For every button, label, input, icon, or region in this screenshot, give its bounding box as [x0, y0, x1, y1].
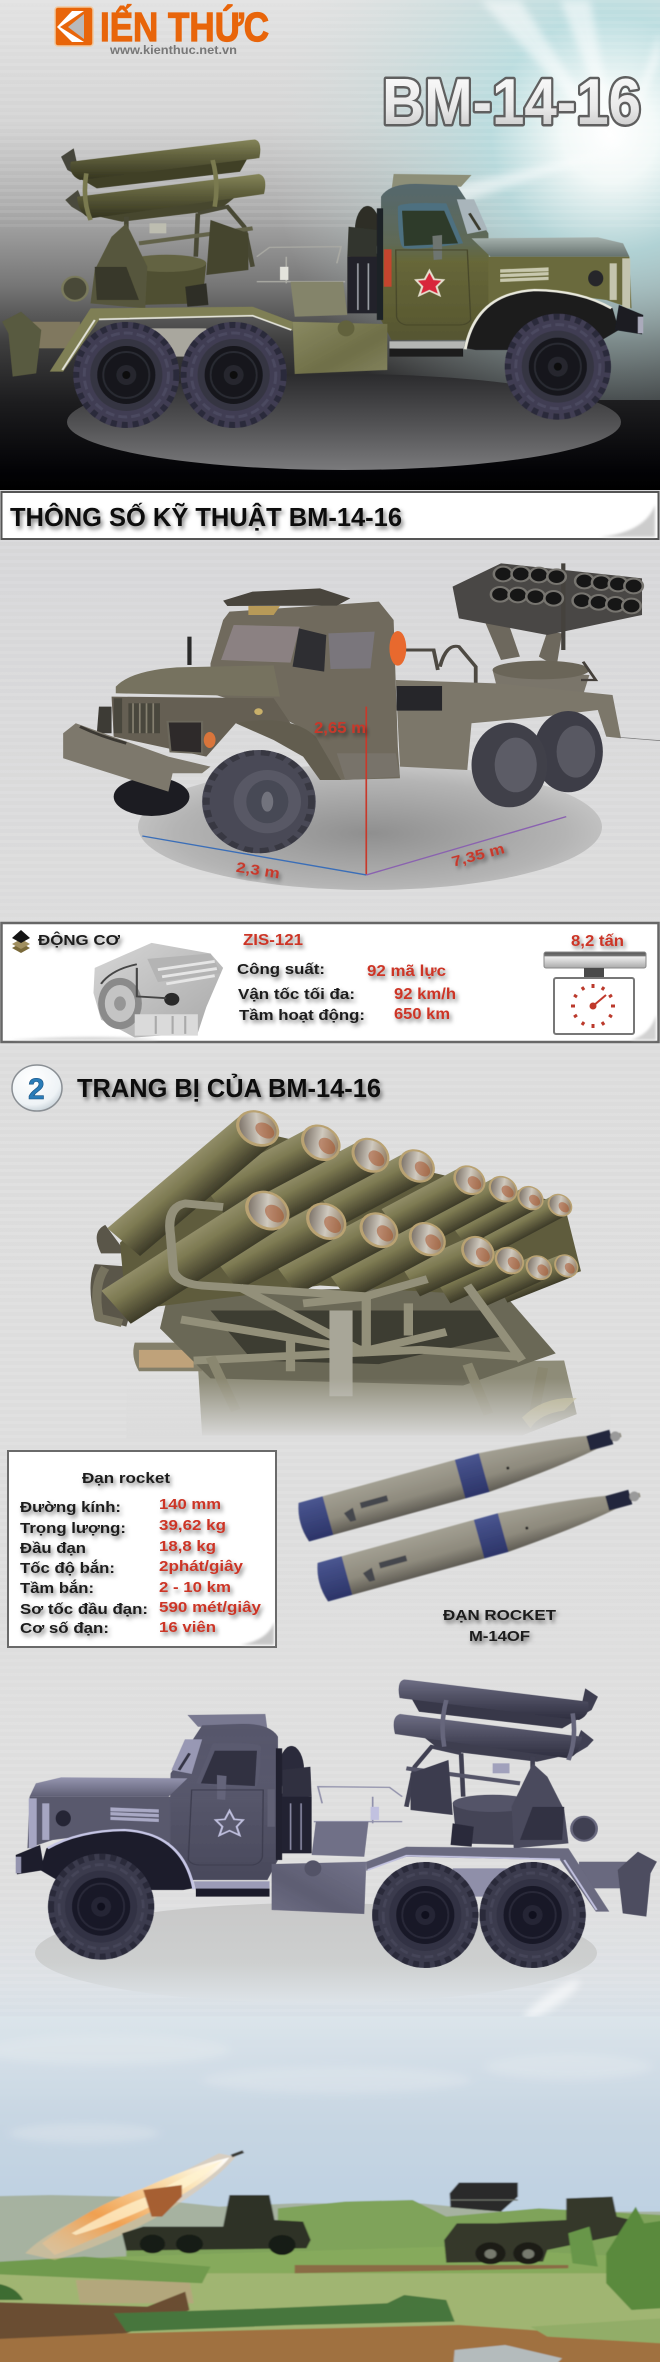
heading panel: specifications — [2, 492, 658, 539]
row: weight — [20, 1517, 226, 1537]
truck 3: monochrome mirrored side view — [16, 1679, 657, 1968]
badge: section number 2: 2 — [28, 1073, 45, 1106]
front wheel — [202, 750, 316, 853]
engine label: ĐỘNG CƠ — [38, 931, 120, 949]
ground ellipse: truck 1 — [67, 374, 621, 470]
truck 2 body — [63, 588, 660, 853]
heading text: THÔNG SỐ KỸ THUẬT BM-14-16 — [10, 502, 402, 532]
dimension labels — [235, 720, 506, 882]
row: diameter — [20, 1496, 221, 1516]
tube mass backing — [120, 1128, 581, 1311]
top speed: Vận tốc tối đa: — [238, 986, 355, 1003]
panel: engine specifications — [2, 923, 658, 1042]
launch tubes, front row — [101, 1183, 583, 1324]
launcher truck firing — [25, 2152, 311, 2260]
launcher truck idle — [444, 2183, 632, 2264]
dirt bank and bushes — [0, 2292, 189, 2340]
row: rate of fire — [20, 1558, 244, 1577]
length label: 7,35 m — [450, 840, 506, 871]
section heading: equipment: TRANG BỊ CỦA BM-14-16 — [77, 1072, 381, 1103]
row: ammunition: 16 viên — [159, 1619, 216, 1636]
icon: weighing scale — [544, 952, 646, 1034]
launcher: 16 tube rocket pod — [91, 1103, 610, 1439]
truck 1: olive BM-14-16 side view — [2, 139, 643, 428]
badge: section number 2 — [12, 1065, 62, 1111]
rocket caption: M-14OF — [469, 1628, 530, 1645]
panel: engine specifications: 92 mã lực — [367, 963, 446, 980]
row: muzzle velocity: Sơ tốc đầu đạn: — [20, 1601, 148, 1618]
logo url: www.kienthuc.net.vn — [109, 43, 237, 57]
rocket launcher pod — [453, 563, 643, 695]
cab — [210, 602, 400, 780]
row: diameter: 140 mm — [159, 1496, 221, 1513]
row: warhead — [20, 1538, 216, 1557]
rocket caption — [443, 1607, 556, 1645]
background: top dark gradient — [0, 0, 660, 490]
icon: layers — [12, 930, 30, 953]
engine model: ZIS-121 — [243, 932, 303, 949]
power: Công suất: — [237, 961, 325, 978]
row: ammunition: Cơ số đạn: — [20, 1620, 109, 1637]
logo wordmark: IẾN THỨC — [100, 4, 269, 50]
weight: 8,2 tấn — [571, 933, 624, 950]
light streak — [520, 1975, 584, 2025]
treeline haze — [0, 2195, 660, 2273]
panel: rocket data table — [8, 1451, 276, 1647]
row: muzzle velocity: 590 mét/giây — [159, 1599, 262, 1616]
row: warhead: 18,8 kg — [159, 1538, 216, 1555]
background: teal glow — [270, 0, 660, 400]
ground ellipse: truck 2 — [138, 764, 602, 890]
row: range: 2 - 10 km — [159, 1579, 231, 1596]
row: rate of fire: Tốc độ bắn: — [20, 1559, 115, 1577]
launch tubes, back row — [107, 1103, 577, 1256]
panel: engine specifications: 650 km — [394, 1006, 450, 1023]
table title: Đạn rocket — [82, 1470, 170, 1487]
background: light middle area — [0, 490, 660, 2040]
row: muzzle velocity — [20, 1599, 262, 1618]
photo: rocket firing in field — [0, 2017, 660, 2362]
puddle — [453, 2345, 562, 2362]
vegetation — [126, 2200, 660, 2273]
panel: engine specifications: 92 km/h — [394, 986, 456, 1003]
row: diameter: Đường kính: — [20, 1499, 121, 1516]
height label: 2,65 m — [314, 720, 366, 737]
width label: 2,3 m — [235, 859, 281, 882]
corn plants — [606, 2207, 660, 2310]
row: ammunition — [20, 1619, 216, 1637]
sky — [0, 2017, 660, 2237]
icon: engine — [93, 943, 223, 1037]
row: rate of fire: 2phát/giây — [159, 1558, 244, 1575]
row: warhead: Đầu đạn — [20, 1540, 86, 1557]
logo icon — [55, 7, 93, 46]
grass field — [0, 2273, 660, 2340]
row: weight: Trọng lượng: — [20, 1520, 126, 1537]
foreground ground — [0, 2325, 660, 2362]
range: Tầm hoạt động: — [239, 1007, 365, 1024]
row: weight: 39,62 kg — [159, 1517, 226, 1534]
row: range: Tầm bắn: — [20, 1579, 94, 1597]
tubular support frame — [97, 1203, 522, 1371]
logo — [55, 4, 269, 57]
dimension lines — [142, 707, 566, 875]
rocket 1 — [295, 1416, 626, 1542]
truck 2: 3/4 view with dimensions — [63, 563, 660, 875]
hood and grille — [116, 665, 280, 697]
rocket caption: ĐẠN ROCKET — [443, 1607, 556, 1624]
row: range — [20, 1579, 231, 1597]
ground ellipse: truck 3 — [35, 1903, 597, 2003]
rocket 2 — [314, 1476, 645, 1602]
